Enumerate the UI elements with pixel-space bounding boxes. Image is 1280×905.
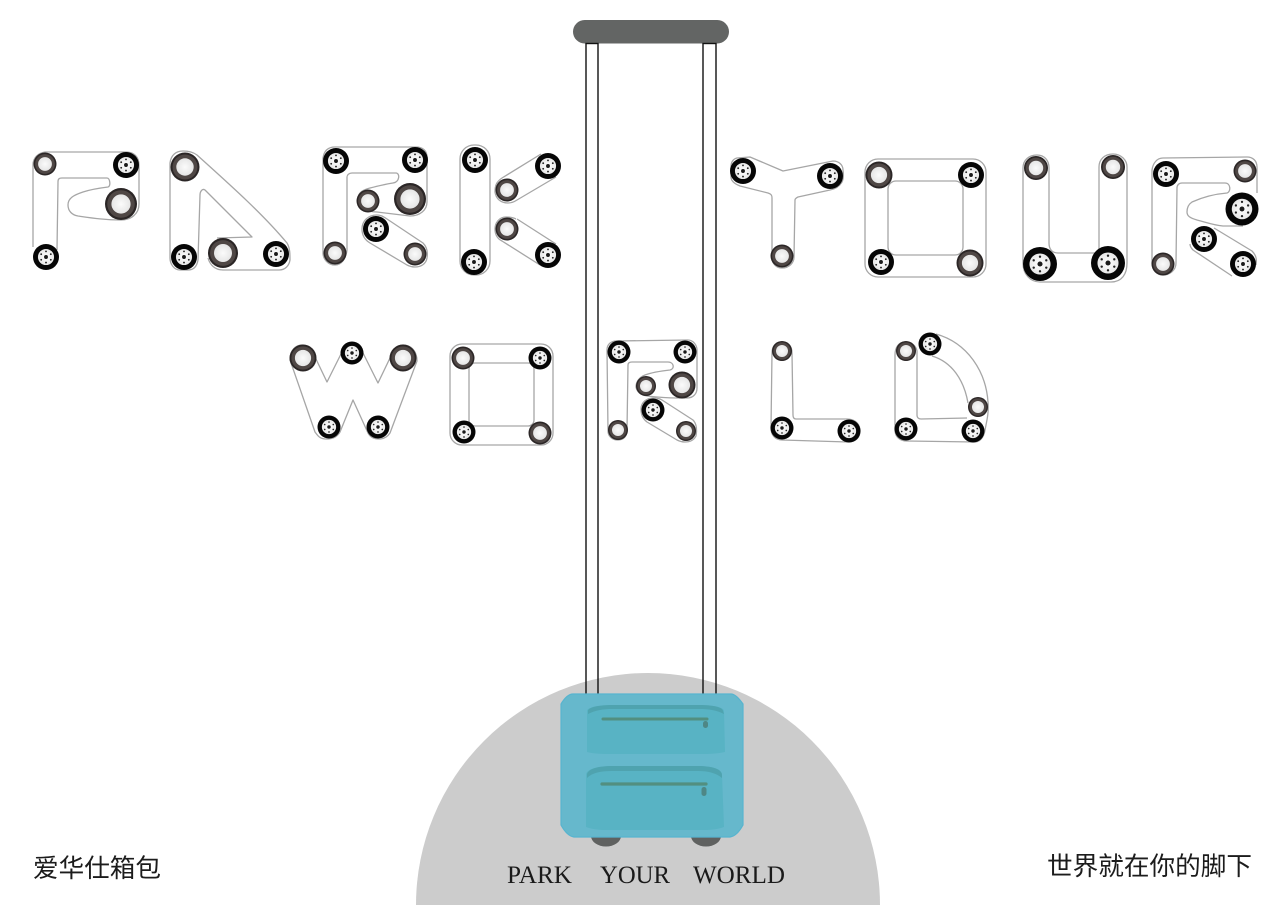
- wheels of O: [866, 162, 984, 276]
- wheels of W: [290, 342, 416, 438]
- luggage telescopic handle: [573, 20, 729, 694]
- tagline: 世界就在你的脚下: [1047, 852, 1252, 881]
- wheels of O (WORLD): [452, 346, 552, 444]
- suitcase: [561, 694, 743, 846]
- letter K: [460, 145, 561, 275]
- slogan: PARK YOUR WORLD: YOUR: [600, 860, 670, 889]
- lower pocket: [586, 766, 724, 830]
- wheels of K: [461, 147, 561, 275]
- letter O (WORLD): [450, 344, 553, 445]
- upper pocket: [587, 705, 725, 754]
- suitcase wheels: [591, 826, 721, 846]
- letter W: [290, 342, 417, 439]
- wheels of P: [33, 152, 139, 270]
- suitcase body: [561, 694, 743, 837]
- wheels of T: [730, 158, 843, 268]
- wheels of R (WORLD): [608, 340, 696, 441]
- letter T: [730, 157, 843, 268]
- upper zipper: [603, 718, 707, 720]
- slogan: PARK YOUR WORLD: [507, 860, 785, 889]
- wheels of A: [170, 152, 289, 270]
- handle rails: [586, 44, 716, 694]
- lower zipper pull: [702, 787, 706, 796]
- letter O: [865, 159, 986, 277]
- wheels of L: [770, 341, 860, 442]
- letter R (TOUR): [1152, 157, 1258, 277]
- wheels of R (TOUR): [1152, 160, 1258, 277]
- handle grip: [573, 20, 729, 44]
- wheels of R: [323, 147, 428, 266]
- slogan: PARK YOUR WORLD: PARK: [507, 860, 573, 889]
- letter R (WORLD): [607, 340, 697, 442]
- wheels of U: [1023, 155, 1125, 281]
- letter P: [33, 152, 139, 270]
- slogan: PARK YOUR WORLD: WORLD: [693, 860, 785, 889]
- letter D: [894, 332, 988, 442]
- letter R: [323, 147, 428, 267]
- letter L: [770, 341, 860, 442]
- letter U: [1023, 154, 1127, 282]
- brand name: 爱华仕箱包: [33, 854, 161, 883]
- semicircle ground: [416, 673, 880, 905]
- letter A: [170, 151, 290, 270]
- upper zipper pull: [703, 721, 708, 728]
- lower zipper: [602, 782, 706, 786]
- wheels of D: [894, 332, 988, 442]
